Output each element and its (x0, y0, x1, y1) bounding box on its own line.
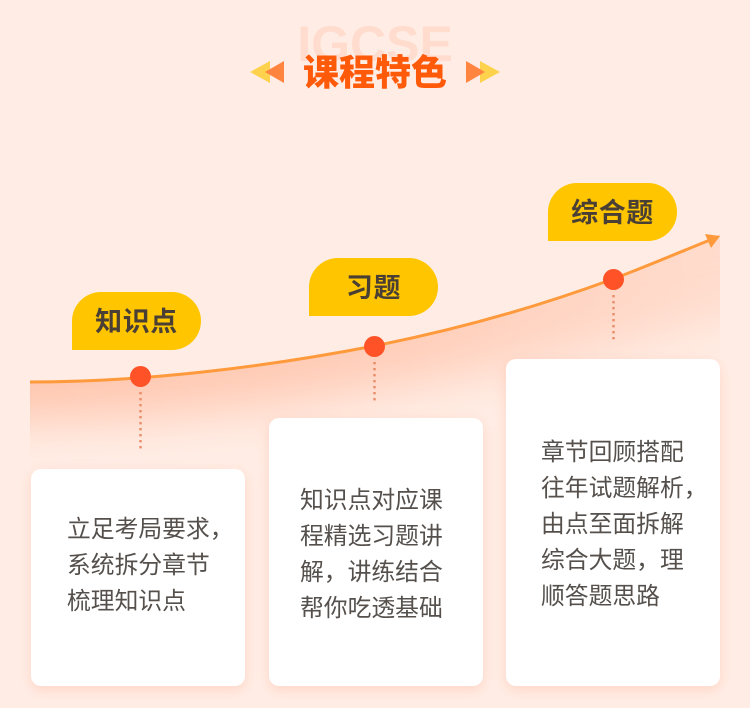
card: 知识点 (31, 469, 245, 686)
card: 习题: 帮你吃透基础 (300, 595, 443, 622)
card: 知识点: 梳理知识点 (67, 588, 186, 615)
card: 习题: 解，讲练结合 (300, 559, 443, 586)
tag: 综合题: 综合题 (571, 198, 654, 228)
card: 习题: 程精选习题讲 (300, 523, 443, 550)
card: 习题: 知识点对应课 (300, 487, 443, 514)
curve line (30, 240, 710, 382)
watermark: IGCSE: IGCSE (297, 16, 453, 72)
card: 综合题 (506, 359, 720, 686)
dotted connectors (140, 295, 614, 451)
card: 综合题: 顺答题思路 (541, 583, 660, 610)
node markers (130, 269, 624, 387)
arrow head (705, 234, 720, 248)
card: 知识点: 系统拆分章节 (67, 552, 210, 579)
tag: 习题: 习题 (346, 273, 401, 303)
card: 知识点: 立足考局要求， (67, 516, 234, 543)
tag: 知识点: 知识点 (95, 307, 178, 337)
area under curve (30, 234, 720, 444)
growth curve chart (30, 234, 720, 448)
title: 课程特色 (303, 52, 447, 93)
card: 综合题: 章节回顾搭配 (541, 439, 684, 466)
tag: 综合题 (548, 183, 677, 241)
icon: left arrows (250, 61, 284, 83)
icon: right arrows (466, 61, 500, 83)
card: 综合题: 往年试题解析， (541, 475, 708, 502)
card: 综合题: 由点至面拆解 (541, 511, 684, 538)
tag: 习题 (309, 258, 438, 316)
tag: 知识点 (72, 292, 201, 350)
card: 习题 (269, 418, 483, 686)
card: 综合题: 综合大题，理 (541, 547, 684, 574)
